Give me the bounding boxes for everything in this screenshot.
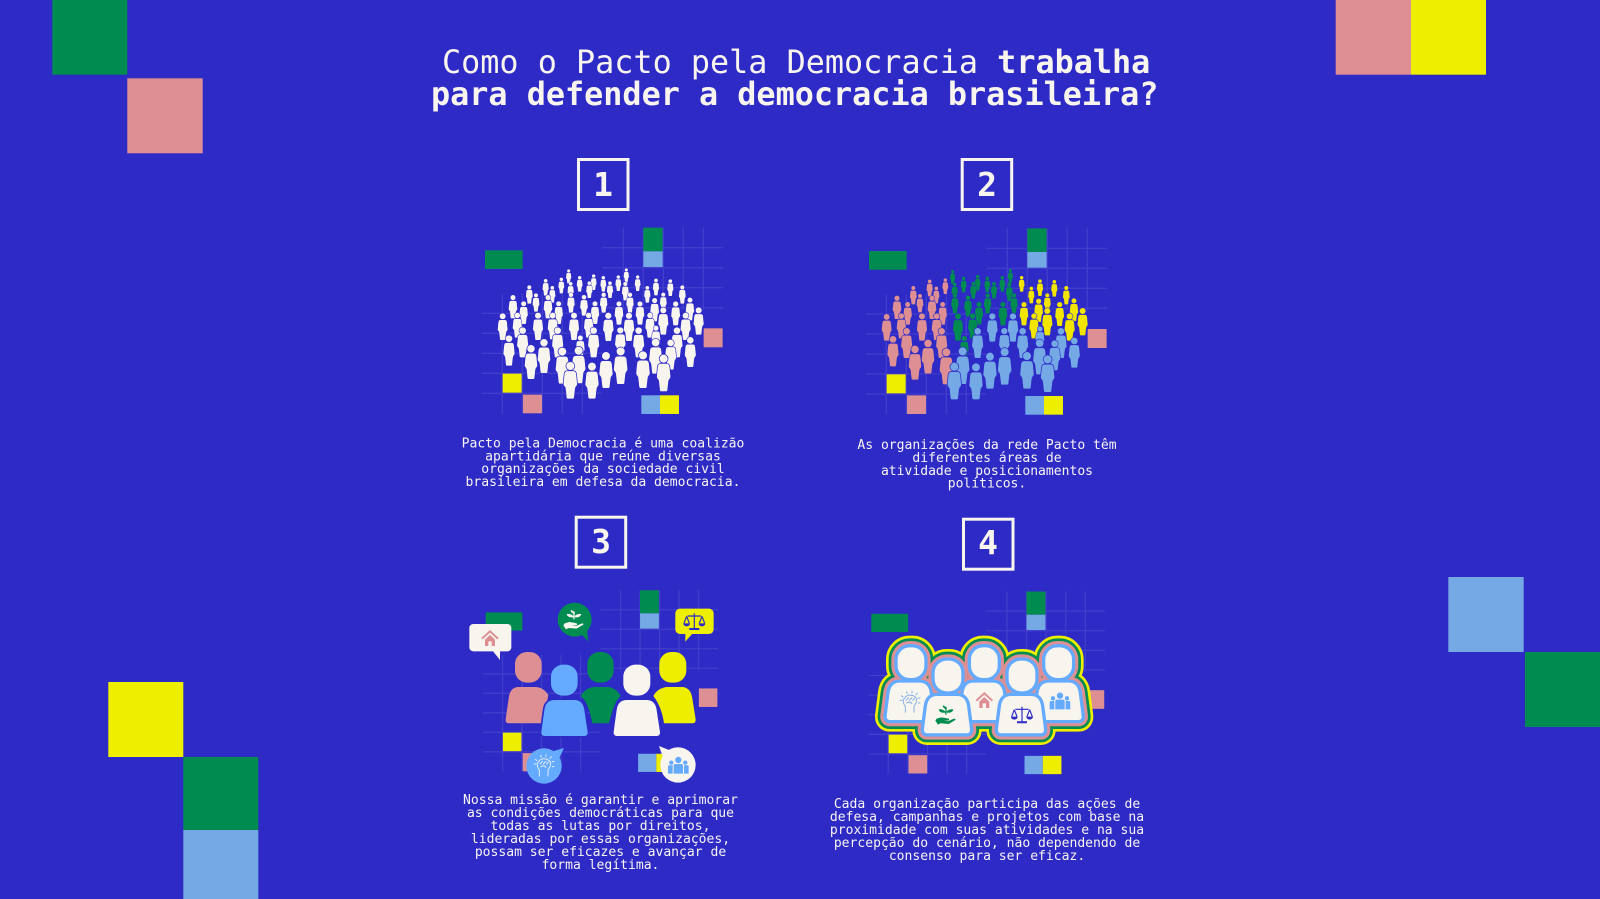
number badge 2 (962, 160, 1012, 210)
title (431, 44, 1158, 113)
bubble: plant in hand (558, 603, 592, 642)
text block 3: todas as lutas por direitos, (491, 819, 710, 834)
text block 1: apartidária que reúne diversas (485, 449, 721, 464)
icon: plant in hand (935, 705, 955, 725)
text block 1: Pacto pela Democracia é uma coalizão (462, 436, 744, 452)
text block 4: defesa, campanhas e projetos com base na (830, 810, 1144, 825)
text block 4: percepção do cenário, não dependendo de (834, 836, 1140, 851)
number badge 1: 1 (593, 165, 613, 204)
text block 1: brasileira em defesa da democracia. (466, 475, 740, 490)
panel 4: united action (830, 519, 1144, 864)
bubble: scales (675, 609, 714, 642)
text block 4 (830, 797, 1144, 864)
panel 2: diversity (857, 160, 1117, 492)
person: blue (541, 665, 588, 736)
person: pink (506, 652, 548, 723)
title: para defender a democracia brasileira? (431, 76, 1158, 113)
illustration: white crowd (482, 228, 723, 414)
text block 3: possam ser eficazes e avançar de (475, 845, 726, 860)
text block 2 (857, 438, 1117, 492)
text block 3 (463, 793, 738, 873)
title: Como o Pacto pela Democracia trabalha (442, 44, 1150, 81)
bubble: group (659, 746, 696, 783)
number badge 2: 2 (977, 165, 997, 204)
number badge 3 (576, 517, 626, 567)
decorative squares: top right (1336, 0, 1486, 75)
person: white (614, 665, 660, 736)
panel 1: coalition (462, 160, 744, 490)
decorative squares: right (1448, 577, 1600, 727)
illustration: people with speech bubbles (469, 590, 718, 784)
text block 3: lideradas por essas organizações, (471, 832, 730, 847)
icon: group (1050, 692, 1070, 709)
text block 4: consenso para ser eficaz. (889, 849, 1085, 864)
person: yellow (653, 652, 696, 723)
text block 1: organizações da sociedade civil (481, 462, 725, 477)
illustration: united people (869, 592, 1105, 774)
number badge 4 (964, 519, 1013, 569)
icon: house (976, 692, 993, 708)
icon: fist (900, 691, 920, 712)
text block 2: As organizações da rede Pacto têm (857, 438, 1117, 453)
illustration: coloured crowd (866, 228, 1107, 415)
text block 4: Cada organização participa das ações de (834, 797, 1140, 812)
number badge 3: 3 (591, 522, 611, 561)
person: green (581, 652, 621, 723)
decorative squares: top left (52, 0, 203, 153)
decorative squares: bottom left (108, 682, 258, 899)
icon: scales (1011, 707, 1033, 723)
text block 3: forma legítima. (542, 858, 659, 873)
text block 2: atividade e posicionamentos (881, 464, 1093, 479)
number badge 4: 4 (978, 523, 998, 562)
text block 2: políticos. (948, 476, 1026, 492)
text block 3: Nossa missão é garantir e aprimorar (463, 793, 738, 808)
text block 3: as condições democráticas para que (467, 806, 734, 821)
text block 2: diferentes áreas de (912, 451, 1062, 466)
bubble: fist (526, 748, 564, 784)
panel 3: mission (463, 517, 738, 873)
number badge 1 (578, 160, 628, 210)
text block 1 (462, 436, 744, 490)
bubble: house (469, 624, 511, 660)
text block 4: proximidade com suas atividades e na sua (830, 823, 1144, 838)
